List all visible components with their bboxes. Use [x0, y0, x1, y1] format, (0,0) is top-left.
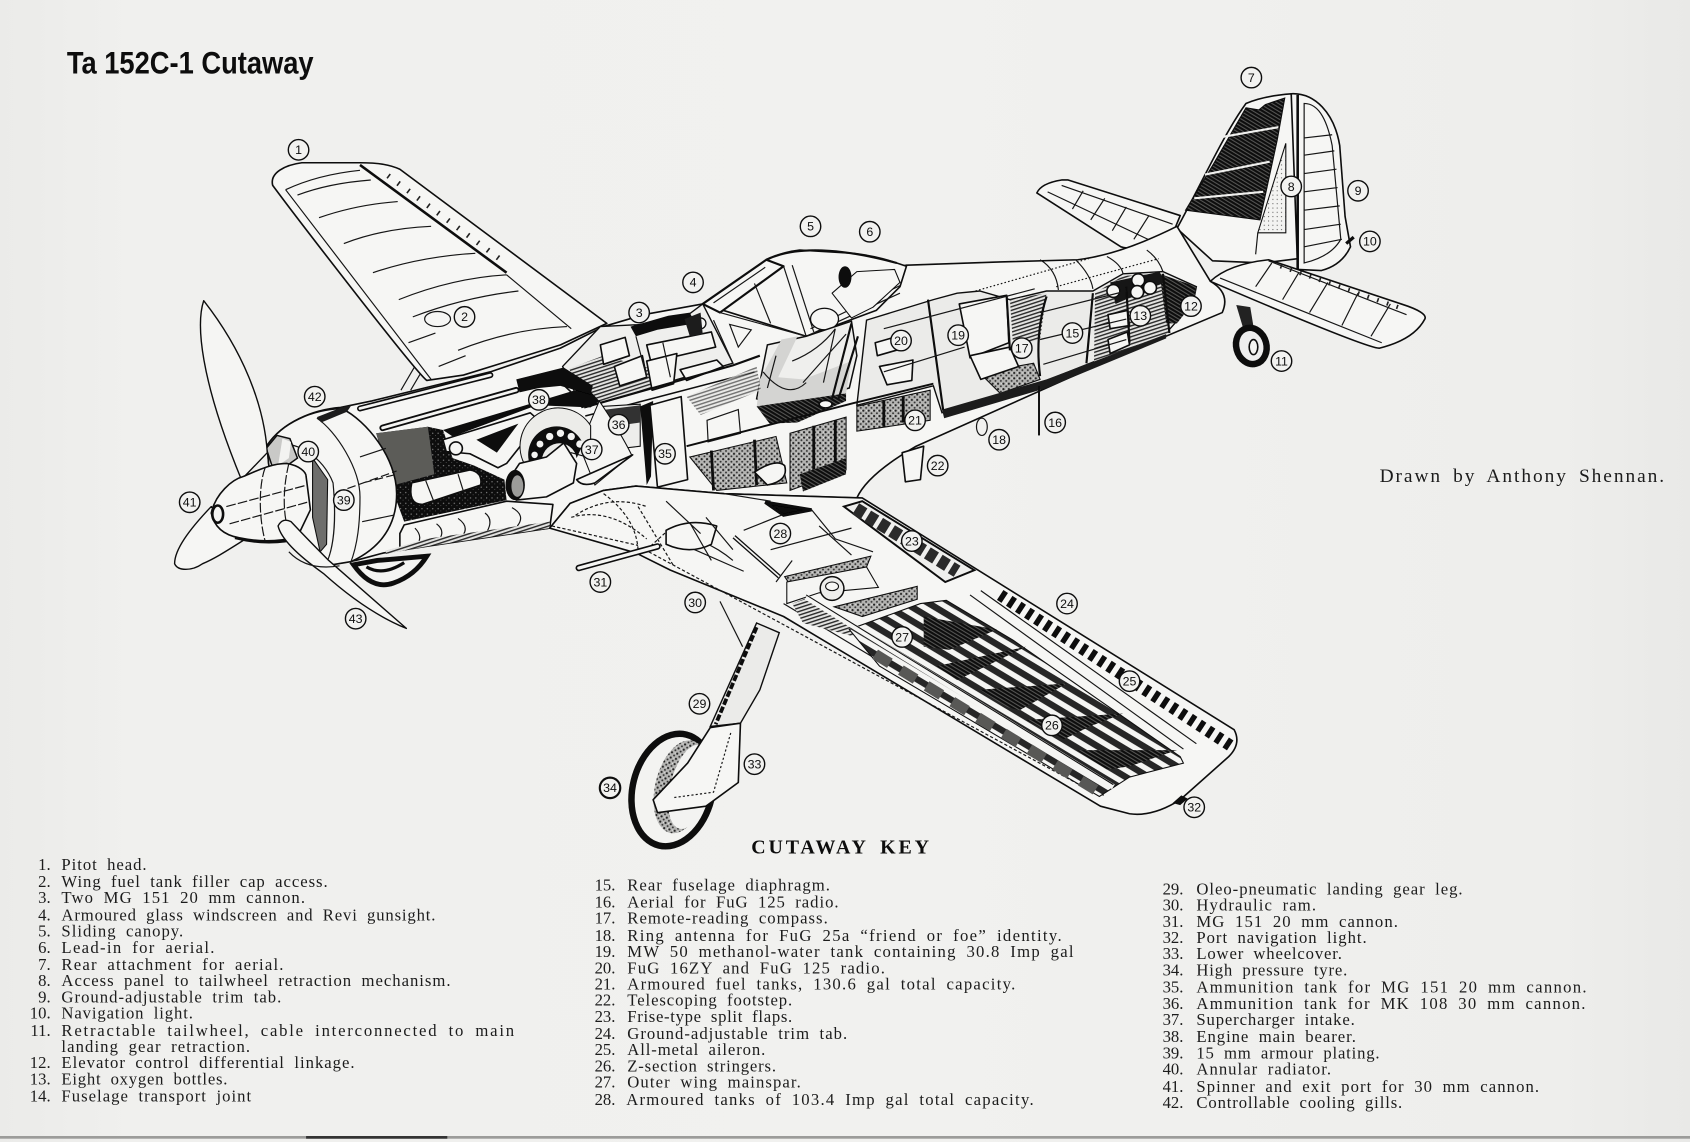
key column 2: FuG 16ZY and FuG 125 radio.: [627, 958, 885, 977]
canopy: [703, 250, 906, 336]
key column 2: [595, 875, 1074, 1109]
key column 1: 4.: [38, 905, 51, 924]
aileron: [970, 591, 1196, 749]
key column 1: Armoured glass windscreen and Revi gunsight.: [61, 905, 435, 924]
key column 3: Annular radiator.: [1196, 1060, 1331, 1079]
key column 2: Outer wing mainspar.: [627, 1073, 801, 1092]
key column 1: Ground-adjustable trim tab.: [61, 987, 281, 1006]
key column 2: Armoured fuel tanks, 130.6 gal total capacity.: [627, 974, 1015, 993]
aircraft cutaway drawing: [175, 94, 1425, 855]
cockpit interior and seat: [757, 321, 858, 424]
key column 2: All-metal aileron.: [627, 1040, 765, 1059]
key column 3: 34.: [1163, 960, 1183, 979]
callout 1: 1: [295, 143, 302, 157]
callout 34: [600, 778, 620, 798]
callout 1: [288, 140, 309, 160]
callout 37: 37: [585, 443, 599, 457]
callout 25: 25: [1123, 674, 1137, 688]
cowling and engine: [360, 368, 633, 554]
callout 21: 21: [908, 414, 922, 428]
key column 3: High pressure tyre.: [1196, 960, 1347, 979]
callout 3: 3: [636, 306, 643, 320]
key column 1: 9.: [38, 987, 51, 1006]
callout 33: [744, 754, 765, 774]
key column 1: landing gear retraction.: [61, 1037, 250, 1056]
callout 2: 2: [461, 310, 468, 324]
key column 3: 30.: [1163, 896, 1183, 915]
callout 18: 18: [992, 433, 1006, 447]
key column 3: 32.: [1163, 928, 1183, 947]
key column 2: Z-section stringers.: [627, 1056, 776, 1075]
callout 22: [927, 455, 948, 476]
key column 3: 37.: [1163, 1010, 1183, 1029]
key column 1: [30, 855, 515, 1106]
callout 33: 33: [748, 757, 761, 771]
main undercarriage: [620, 601, 779, 855]
key column 2: 18.: [595, 926, 615, 945]
key column 2: Frise-type split flaps.: [627, 1007, 792, 1026]
key column 3: [1163, 880, 1587, 1112]
callout 42: 42: [308, 390, 322, 404]
callout 5: [800, 216, 821, 237]
callout 20: [891, 330, 911, 351]
callout 38: 38: [532, 393, 546, 407]
key column 3: Hydraulic ram.: [1196, 896, 1316, 915]
key column 3: Supercharger intake.: [1196, 1010, 1355, 1029]
key column 2: Remote-reading compass.: [627, 909, 828, 928]
key column 1: Lead-in for aerial.: [61, 938, 214, 957]
key column 1: Sliding canopy.: [61, 922, 183, 941]
callout 8: [1281, 176, 1301, 197]
callout 23: [902, 531, 922, 551]
key column 3: Port navigation light.: [1196, 928, 1367, 947]
callout 11: [1271, 351, 1292, 371]
callout 15: [1062, 323, 1083, 343]
callout 8: 8: [1288, 180, 1295, 194]
callout 7: [1241, 67, 1262, 88]
key column 2: 23.: [595, 1007, 615, 1026]
key column 3: 40.: [1163, 1060, 1183, 1079]
key column 3: 42.: [1163, 1093, 1183, 1112]
callout 17: [1012, 338, 1032, 358]
callout 22: 22: [931, 459, 945, 473]
cowl ring and annular radiator: [266, 405, 397, 567]
callout 41: [179, 492, 200, 512]
key column 1: 11.: [30, 1021, 51, 1040]
wing ribs and stringers: [806, 595, 1183, 796]
key column 1: 8.: [38, 971, 51, 990]
callout 31: [590, 572, 611, 592]
key column 1: Two MG 151 20 mm cannon.: [61, 888, 305, 907]
key column 2: Armoured tanks of 103.4 Imp gal total capacity.: [626, 1090, 1034, 1109]
callout 23: 23: [905, 534, 919, 548]
propeller: [175, 301, 406, 628]
callout 12: [1181, 296, 1201, 316]
callout 37: [581, 439, 602, 460]
main wheel under cowling: [354, 556, 427, 585]
key column 3: 39.: [1163, 1043, 1183, 1062]
callout 43: [345, 608, 366, 629]
key column 2: 17.: [595, 909, 615, 928]
key column 2: Ground-adjustable trim tab.: [627, 1024, 847, 1043]
callout 5: 5: [807, 220, 814, 234]
callout 21: [905, 410, 925, 431]
key column 3: 41.: [1163, 1077, 1183, 1096]
key column 1: 10.: [30, 1004, 51, 1023]
callout 19: [948, 325, 968, 345]
callout 13: [1130, 306, 1151, 326]
title: Ta 152C-1 Cutaway: [67, 45, 314, 80]
callout 6: [860, 221, 880, 242]
callout 3: [629, 302, 649, 323]
callout 11: 11: [1275, 354, 1288, 368]
callout 12: 12: [1184, 299, 1198, 313]
far wing: [272, 163, 607, 390]
callout 28: [770, 523, 791, 544]
callout 36: 36: [612, 418, 626, 432]
key column 1: Wing fuel tank filler cap access.: [61, 872, 328, 891]
key column 3: Oleo-pneumatic landing gear leg.: [1196, 880, 1463, 899]
near wing: [550, 486, 1237, 814]
callout 9: [1348, 181, 1368, 201]
key column 1: 13.: [30, 1069, 51, 1088]
aerial mast and ring antenna: [902, 386, 1039, 482]
key column 1: Rear attachment for aerial.: [61, 955, 283, 974]
fuselage: [267, 226, 1225, 567]
split flap: [844, 501, 974, 582]
key column 1: Elevator control differential linkage.: [61, 1053, 355, 1072]
key column 2: 24.: [595, 1024, 615, 1043]
key column 1: 2.: [38, 872, 51, 891]
callout 10: [1360, 231, 1380, 252]
callout 29: [689, 694, 710, 714]
key column 1: Retractable tailwheel, cable interconnected to main: [61, 1021, 515, 1040]
callout 38: [529, 390, 549, 410]
key column 3: 31.: [1163, 912, 1183, 931]
key column 1: 12.: [30, 1053, 51, 1072]
callout 28: 28: [773, 527, 787, 541]
callout 27: 27: [895, 630, 909, 644]
key column 3: Ammunition tank for MK 108 30 mm cannon.: [1196, 994, 1585, 1013]
key column 3: Engine main bearer.: [1196, 1027, 1356, 1046]
callout 13: 13: [1133, 309, 1147, 323]
key column 3: Controllable cooling gills.: [1196, 1093, 1402, 1112]
key column 2: 22.: [595, 991, 615, 1010]
key column 1: 1.: [38, 855, 51, 874]
key column 3: 38.: [1163, 1027, 1183, 1046]
key column 2: Telescoping footstep.: [627, 991, 792, 1010]
callout 29: 29: [693, 697, 706, 711]
callout 27: [892, 627, 912, 647]
key column 1: Eight oxygen bottles.: [61, 1069, 227, 1088]
callout numbers: [179, 67, 1380, 818]
key column 3: Spinner and exit port for 30 mm cannon.: [1196, 1077, 1539, 1096]
tail wheel: [1232, 305, 1271, 368]
key column 2: 28.: [595, 1090, 615, 1109]
key column 3: 29.: [1163, 880, 1183, 899]
callout 39: [334, 490, 354, 510]
key column 1: 6.: [38, 938, 51, 957]
key column 3: 33.: [1163, 944, 1183, 963]
key column 2: 21.: [595, 974, 615, 993]
callout 19: 19: [951, 329, 965, 343]
callout 36: [608, 414, 629, 435]
callout 17: 17: [1015, 341, 1029, 355]
key column 2: 19.: [595, 942, 615, 961]
callout 16: 16: [1048, 416, 1062, 430]
callout 20: 20: [894, 334, 908, 348]
callout 4: [683, 272, 703, 293]
cannon barrel: [579, 546, 657, 568]
callout 9: 9: [1355, 184, 1362, 198]
callout 26: 26: [1045, 719, 1059, 733]
key column 2: 20.: [595, 958, 615, 977]
key column 3: 36.: [1163, 994, 1183, 1013]
key column 2: 16.: [595, 893, 615, 912]
callout 40: 40: [301, 445, 315, 459]
key column 2: 15.: [595, 875, 615, 894]
callout 24: [1057, 593, 1077, 614]
callout 7: 7: [1248, 71, 1255, 85]
callout 32: 32: [1187, 801, 1201, 815]
callout 41: 41: [183, 496, 197, 510]
key column 2: MW 50 methanol-water tank containing 30.8 Imp gal: [627, 942, 1074, 961]
skin panel, ammunition boxes and fuel tanks: [604, 366, 933, 491]
key column 1: 3.: [38, 888, 51, 907]
callout 43: 43: [349, 612, 363, 626]
callout 15: 15: [1066, 326, 1079, 340]
callout 2: [454, 307, 475, 327]
callout 10: 10: [1363, 235, 1377, 249]
rear fuselage cutaway: [857, 250, 1196, 418]
callout 42: [304, 386, 325, 407]
wing root tanks and skin tears: [666, 494, 917, 636]
callout 25: [1119, 671, 1140, 691]
key column 1: Access panel to tailwheel retraction mechanism.: [61, 971, 451, 990]
callout 30: 30: [688, 596, 702, 610]
callout 16: [1045, 412, 1065, 433]
key column 1: Pitot head.: [61, 855, 147, 874]
callout 31: 31: [593, 575, 607, 589]
key column 2: Aerial for FuG 125 radio.: [627, 893, 839, 912]
key column 1: 7.: [38, 955, 51, 974]
key column 3: Lower wheelcover.: [1196, 944, 1342, 963]
left tailplane: [1037, 180, 1180, 248]
cutaway key heading: CUTAWAY KEY: [751, 837, 929, 859]
callout 30: [685, 592, 705, 613]
callout 32: [1184, 797, 1204, 818]
key column 1: 5.: [38, 922, 51, 941]
artist credit: Drawn by Anthony Shennan.: [1380, 466, 1664, 487]
callout 40: [298, 441, 318, 462]
key column 3: 15 mm armour plating.: [1196, 1043, 1380, 1062]
fin and rudder: [1177, 94, 1354, 271]
callout 35: 35: [658, 447, 672, 461]
key column 3: Ammunition tank for MG 151 20 mm cannon.: [1196, 978, 1587, 997]
callout 34: 34: [603, 781, 617, 795]
right tailplane: [1210, 260, 1425, 348]
key column 1: Fuselage transport joint: [61, 1087, 251, 1106]
key column 2: Rear fuselage diaphragm.: [627, 875, 830, 894]
key column 2: 27.: [595, 1073, 615, 1092]
key column 2: 26.: [595, 1056, 615, 1075]
key column 1: Navigation light.: [61, 1004, 193, 1023]
callout 6: 6: [866, 225, 873, 239]
key column 2: Ring antenna for FuG 25a “friend or foe” identity.: [627, 926, 1062, 945]
callout 24: 24: [1060, 597, 1074, 611]
callout 26: [1042, 715, 1062, 736]
key column 3: 35.: [1163, 978, 1183, 997]
callout 18: [989, 430, 1009, 450]
key column 3: MG 151 20 mm cannon.: [1196, 912, 1398, 931]
callout 35: [655, 444, 675, 464]
callout 4: 4: [690, 276, 697, 290]
gun bay with MG 151 cannon: [550, 304, 760, 416]
key column 2: 25.: [595, 1040, 615, 1059]
callout 39: 39: [337, 493, 351, 507]
key column 1: 14.: [30, 1087, 51, 1106]
